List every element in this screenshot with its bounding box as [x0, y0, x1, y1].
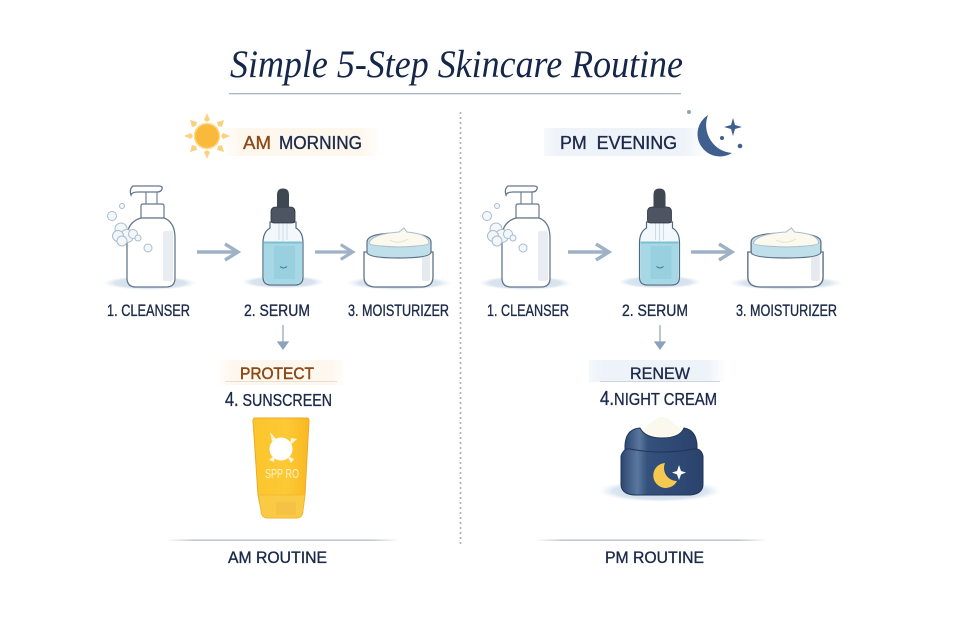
AM heading	[222, 128, 380, 156]
protect label	[217, 360, 346, 385]
step 4 night cream label: 4.NIGHT CREAM	[600, 388, 717, 410]
step 1 cleanser	[103, 186, 197, 320]
step 4 sunscreen label: 4. SUNSCREEN	[225, 389, 332, 411]
step 1 cleanser	[478, 186, 572, 320]
panel: AM morning routine	[103, 113, 452, 567]
icon: sunscreen tube: SPP RO	[265, 466, 299, 481]
PM routine footer: PM ROUTINE	[605, 549, 704, 567]
AM heading: AM	[243, 133, 271, 153]
PM heading: PM EVENING	[560, 133, 677, 153]
icon: crescent moon and stars	[687, 110, 742, 156]
arrow: cleanser to serum	[568, 244, 609, 260]
step 1 cleanser: 1. CLEANSER	[107, 301, 190, 320]
panel: PM evening routine	[478, 110, 844, 567]
step 3 moisturizer: 3. MOISTURIZER	[736, 301, 837, 320]
title: Simple 5-Step Skincare Routine	[230, 43, 683, 86]
icon: night cream jar	[598, 417, 722, 502]
AM routine footer: AM ROUTINE	[228, 549, 327, 567]
center divider	[460, 112, 462, 546]
step 2 serum: 2. SERUM	[622, 301, 688, 320]
arrow: serum to night cream	[655, 325, 665, 349]
arrow: serum to moisturizer	[691, 244, 732, 260]
arrow: serum to sunscreen	[278, 325, 288, 349]
step 3 moisturizer: 3. MOISTURIZER	[348, 301, 449, 320]
renew label: RENEW	[630, 364, 690, 383]
protect label: PROTECT	[240, 364, 314, 383]
AM heading: MORNING	[279, 133, 362, 153]
icon: sunscreen tube	[253, 418, 309, 518]
step 3 moisturizer	[346, 228, 452, 320]
PM heading	[544, 128, 709, 156]
arrow: cleanser to serum	[197, 244, 238, 260]
step 2 serum	[241, 188, 325, 320]
step 2 serum	[618, 188, 702, 320]
step 1 cleanser: 1. CLEANSER	[487, 301, 569, 320]
step 2 serum: 2. SERUM	[244, 301, 310, 320]
arrow: serum to moisturizer	[315, 245, 353, 259]
renew label	[589, 360, 727, 383]
step 3 moisturizer	[728, 228, 844, 320]
icon: sun	[184, 113, 230, 159]
